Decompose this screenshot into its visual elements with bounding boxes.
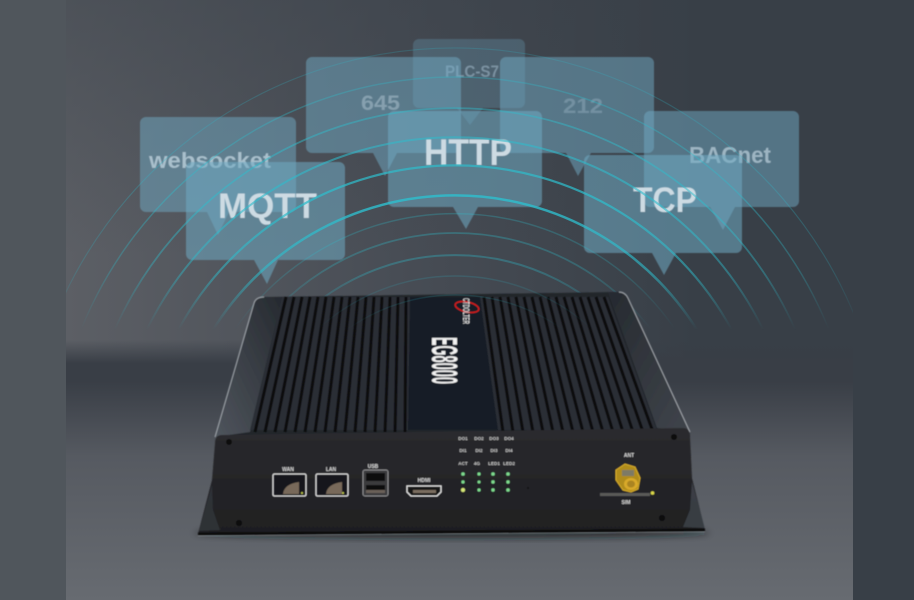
port: WAN: WAN [282,467,294,473]
indicator labels: DI1 [459,448,467,453]
speech bubble: TCP [584,155,742,275]
device lid [215,292,690,437]
front panel [198,428,705,536]
speech bubble: 212 [500,57,654,176]
speech bubble: PLC-S7: PLC-S7 [445,62,499,81]
port: LAN: LAN [326,467,337,473]
heat sink ribs [255,297,653,432]
port: USB [363,464,388,496]
speech bubble: HTTP [388,111,542,229]
indicator LEDs [461,472,529,492]
port: HDMI: HDMI [418,478,431,484]
indicator labels: DO2 [474,436,484,441]
speech bubble: MQTT [186,162,345,284]
speech bubble: TCP: TCP [633,181,697,220]
device: EG8000 gateway: EG8000 [424,337,465,384]
indicator labels: DO3 [489,436,499,441]
indicator labels: DO4 [504,436,514,441]
indicator labels: LED2 [503,461,515,466]
screws [226,434,677,526]
port: LAN [316,467,348,496]
device shadow [194,528,710,538]
indicator labels: DI2 [475,448,483,453]
speech bubble: BACnet: BACnet [689,142,771,168]
port: USB: USB [368,464,379,470]
port: HDMI [407,478,441,496]
antenna connector: ANT [624,453,634,459]
indicator labels: DI4 [505,448,513,453]
signal arcs over device lid [338,275,573,320]
speech bubble: websocket [140,117,296,235]
indicator labels: 4G [474,461,480,466]
speech bubble: 645 [306,57,461,176]
speech bubble: 212: 212 [563,95,603,118]
speech bubble: websocket: websocket [148,148,272,173]
SIM slot [600,491,654,506]
speech bubble: PLC-S7 [413,39,525,125]
signal arcs [46,48,864,340]
indicator labels [458,436,515,466]
port: WAN [273,467,306,496]
SIM slot: SIM [622,500,630,506]
indicator labels: ACT [458,461,468,466]
indicator labels: LED1 [488,461,500,466]
speech bubble: HTTP: HTTP [424,132,512,173]
speech bubble: MQTT: MQTT [218,187,317,226]
brand logo: CTDOLTER [461,298,471,324]
indicator labels: DO1 [458,436,468,441]
indicator labels: DI3 [490,448,498,453]
speech bubble: BACnet [644,111,799,230]
brand logo [454,298,480,324]
speech bubble: 645: 645 [361,92,400,115]
device: EG8000 gateway [198,292,705,536]
antenna connector [616,453,640,492]
